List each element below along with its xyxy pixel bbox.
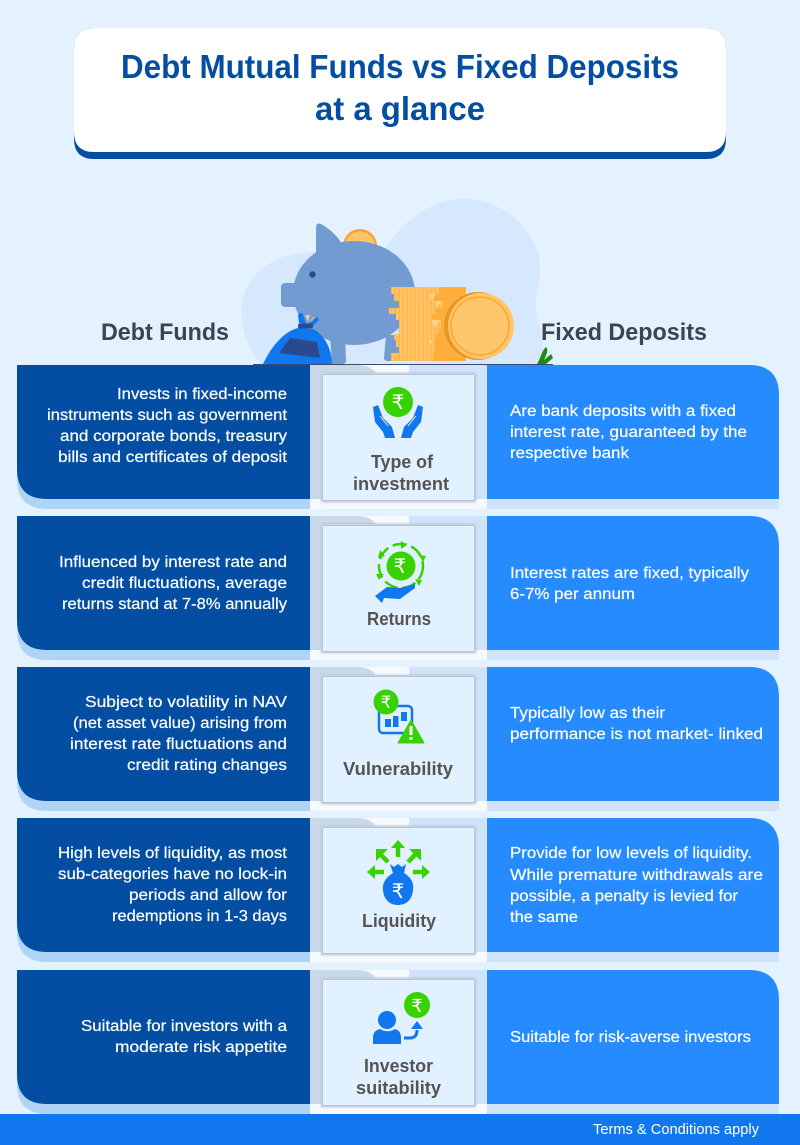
panel: debt funds, investor suitability: moderate risk appetite (115, 1039, 287, 1056)
panel: fixed deposits, investor suitability: Suitable for risk-averse investors (510, 1029, 751, 1046)
title text: Debt Mutual Funds vs Fixed Deposits (121, 48, 679, 85)
label: Type of investment: investment (353, 474, 449, 494)
panel: debt funds, liquidity: High levels of liquidity, as most (58, 845, 288, 862)
panel: fixed deposits, type of investment: respective bank (510, 445, 629, 462)
icon: investor with rising rupee (373, 992, 430, 1044)
row: vulnerability (17, 667, 779, 811)
title text (121, 48, 679, 127)
panel: debt funds, type of investment (17, 365, 310, 509)
panel: fixed deposits, liquidity (487, 818, 779, 962)
label: Liquidity: Liquidity (362, 911, 436, 931)
panel: fixed deposits, type of investment: interest rate, guaranteed by the (510, 424, 747, 441)
panel: centre card, returns (310, 516, 487, 660)
label: Vulnerability: Vulnerability (343, 759, 453, 779)
panel: debt funds, returns: credit fluctuations, average (82, 575, 287, 592)
panel: centre card, type of investment (310, 365, 487, 509)
panel: debt funds, investor suitability: Suitable for investors with a (81, 1018, 287, 1035)
panel: debt funds, type of investment: bills and certificates of deposit (58, 449, 288, 466)
panel: fixed deposits, liquidity: Provide for low levels of liquidity. (510, 845, 752, 862)
panel: debt funds, liquidity: sub-categories have no lock-in (58, 866, 287, 883)
panel: fixed deposits, investor suitability (487, 970, 779, 1114)
panel: fixed deposits, type of investment: Are bank deposits with a fixed (510, 403, 736, 420)
icon: hands holding rupee coin (373, 387, 423, 438)
panel: debt funds, vulnerability: credit rating changes (127, 757, 287, 774)
icon: chart with rupee and warning (374, 690, 424, 743)
panel: debt funds, investor suitability (17, 970, 310, 1114)
heading: Fixed Deposits: Fixed Deposits (541, 319, 707, 346)
row: investor suitability (17, 970, 779, 1114)
footer bar (0, 1114, 800, 1145)
label: Returns: Returns (367, 609, 431, 629)
panel: fixed deposits, returns: 6-7% per annum (510, 586, 635, 603)
panel: debt funds, type of investment: and corporate bonds, treasury (60, 428, 287, 445)
panel: debt funds, type of investment: Invests in fixed-income (117, 386, 287, 403)
panel: debt funds, vulnerability: (net asset value) arising from (73, 715, 287, 732)
icon: chart with rupee and warning: ₹ (381, 693, 391, 712)
panel: debt funds, returns (17, 516, 310, 660)
panel: debt funds, returns: Influenced by interest rate and (59, 554, 287, 571)
panel: fixed deposits, type of investment (487, 365, 779, 509)
panel: centre card, liquidity (310, 818, 487, 962)
icon: rupee with circular arrows over hand: ₹ (394, 556, 406, 578)
illustration: piggy bank, coins and money bag (241, 199, 553, 366)
footer bar: Terms & Conditions apply (593, 1122, 760, 1138)
panel: fixed deposits, vulnerability: Typically low as their (510, 705, 665, 722)
heading: Debt Funds: Debt Funds (101, 319, 229, 346)
icon: rupee with circular arrows over hand (375, 541, 426, 603)
icon: money bag with arrows (367, 840, 430, 905)
coin stack rows (389, 287, 466, 361)
panel: fixed deposits, returns (487, 516, 779, 660)
label: Investor suitability: Investor (364, 1056, 433, 1076)
panel: fixed deposits, liquidity: the same (510, 909, 578, 926)
title card (74, 28, 726, 159)
panel: debt funds, vulnerability: Subject to volatility in NAV (85, 694, 288, 711)
panel: fixed deposits, liquidity: While premature withdrawals are (510, 867, 763, 884)
panel: centre card, vulnerability (310, 667, 487, 811)
panel: debt funds, type of investment: instruments such as government (47, 407, 288, 424)
panel: debt funds, liquidity: periods and allow for (129, 887, 287, 904)
icon: money bag with arrows: ₹ (392, 881, 404, 903)
label: Type of investment (353, 452, 449, 494)
title text: at a glance (315, 90, 485, 127)
panel: debt funds, liquidity: redemptions in 1-3 days (112, 908, 287, 925)
row: returns (17, 516, 779, 660)
panel: fixed deposits, vulnerability: performance is not market- linked (510, 726, 763, 743)
label: Investor suitability (356, 1056, 441, 1098)
panel: debt funds, vulnerability: interest rate fluctuations and (70, 736, 287, 753)
row: type of investment (17, 365, 779, 509)
panel: fixed deposits, vulnerability (487, 667, 779, 811)
panel: centre card, investor suitability (310, 970, 487, 1114)
label: Investor suitability: suitability (356, 1078, 441, 1098)
row: liquidity (17, 818, 779, 962)
panel: fixed deposits, returns: Interest rates are fixed, typically (510, 565, 749, 582)
panel: debt funds, liquidity (17, 818, 310, 962)
label: Type of investment: Type of (371, 452, 434, 472)
panel: debt funds, vulnerability (17, 667, 310, 811)
icon: hands holding rupee coin: ₹ (392, 392, 404, 414)
panel: fixed deposits, liquidity: possible, a penalty is levied for (510, 888, 738, 905)
icon: investor with rising rupee: ₹ (411, 996, 423, 1016)
panel: debt funds, returns: returns stand at 7-8% annually (62, 596, 287, 613)
